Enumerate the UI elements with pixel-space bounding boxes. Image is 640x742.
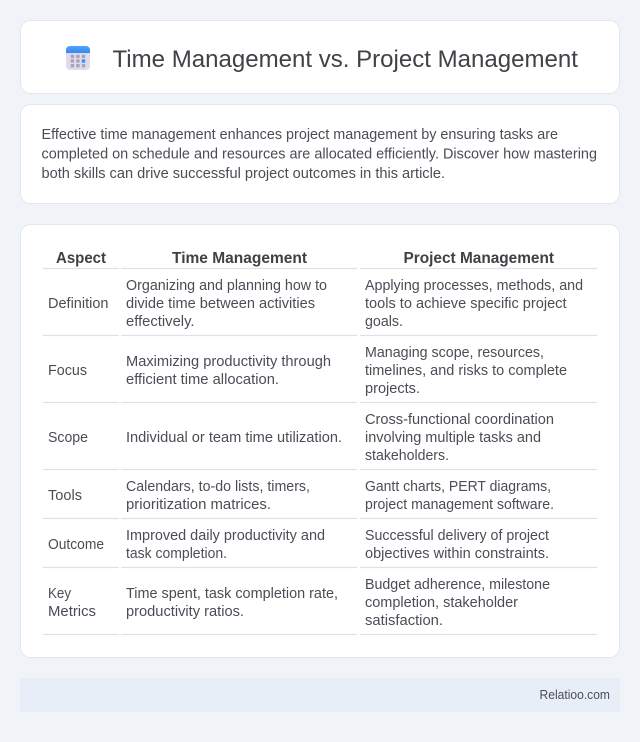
row: outcome: Improved daily productivity and xyxy=(126,528,325,544)
row: definition: Applying processes, methods, and xyxy=(365,278,583,294)
row: scope: Scope xyxy=(48,430,88,446)
row: scope xyxy=(48,412,554,464)
intro text: Effective time management enhances project management by ensuring tasks are xyxy=(42,127,558,143)
table header xyxy=(56,250,555,267)
icon: calendar xyxy=(66,46,90,70)
row: tools: project management software. xyxy=(365,497,554,513)
row: key metrics: satisfaction. xyxy=(365,613,443,629)
row: key metrics: Time spent, task completion rate, xyxy=(126,586,338,602)
row: tools: prioritization matrices. xyxy=(126,497,271,513)
table header: Project Management xyxy=(404,250,555,267)
footer credit: Relatioo.com xyxy=(540,688,610,702)
row: key metrics: completion, stakeholder xyxy=(365,595,518,611)
footer bar xyxy=(20,678,620,712)
row: focus: Maximizing productivity through xyxy=(126,354,331,370)
row: outcome xyxy=(48,528,549,562)
intro panel xyxy=(20,104,620,204)
intro text: completed on schedule and resources are allocated efficiently. Discover how mastering xyxy=(42,146,597,162)
row: key metrics: Budget adherence, milestone xyxy=(365,577,550,593)
row: outcome: Successful delivery of project xyxy=(365,528,549,544)
row: focus: Managing scope, resources, xyxy=(365,345,544,361)
table header: Aspect xyxy=(56,250,107,267)
header panel xyxy=(20,20,620,94)
row: definition: goals. xyxy=(365,314,403,330)
row: key metrics: Metrics xyxy=(48,604,96,620)
row: outcome: objectives within constraints. xyxy=(365,546,549,562)
intro text: both skills can drive successful project outcomes in this article. xyxy=(42,166,445,182)
title: Time Management vs. Project Management xyxy=(112,46,578,73)
row: key metrics: productivity ratios. xyxy=(126,604,244,620)
row: key metrics xyxy=(48,577,550,629)
row: definition: effectively. xyxy=(126,314,194,330)
intro text xyxy=(42,127,597,182)
row: scope: stakeholders. xyxy=(365,448,449,464)
row: scope: Individual or team time utilization. xyxy=(126,430,342,446)
table header: Time Management xyxy=(172,250,308,267)
row: focus: efficient time allocation. xyxy=(126,372,279,388)
row: scope: Cross-functional coordination xyxy=(365,412,554,428)
row: focus: projects. xyxy=(365,381,420,397)
row: outcome: task completion. xyxy=(126,546,227,562)
row: focus: Focus xyxy=(48,363,87,379)
row: tools: Calendars, to-do lists, timers, xyxy=(126,479,310,495)
row: focus xyxy=(48,345,567,397)
row: scope: involving multiple tasks and xyxy=(365,430,541,446)
row: tools: Gantt charts, PERT diagrams, xyxy=(365,479,551,495)
row: focus: timelines, and risks to complete xyxy=(365,363,567,379)
row: key metrics: Key xyxy=(48,586,72,602)
row: outcome: Outcome xyxy=(48,537,104,553)
row: tools xyxy=(48,479,554,513)
row: definition: Definition xyxy=(48,296,108,312)
row: definition: divide time between activities xyxy=(126,296,315,312)
comparison table panel xyxy=(20,224,620,658)
row: definition xyxy=(48,278,583,330)
row: definition: Organizing and planning how to xyxy=(126,278,327,294)
row: definition: tools to achieve specific project xyxy=(365,296,566,312)
row: tools: Tools xyxy=(48,488,82,504)
